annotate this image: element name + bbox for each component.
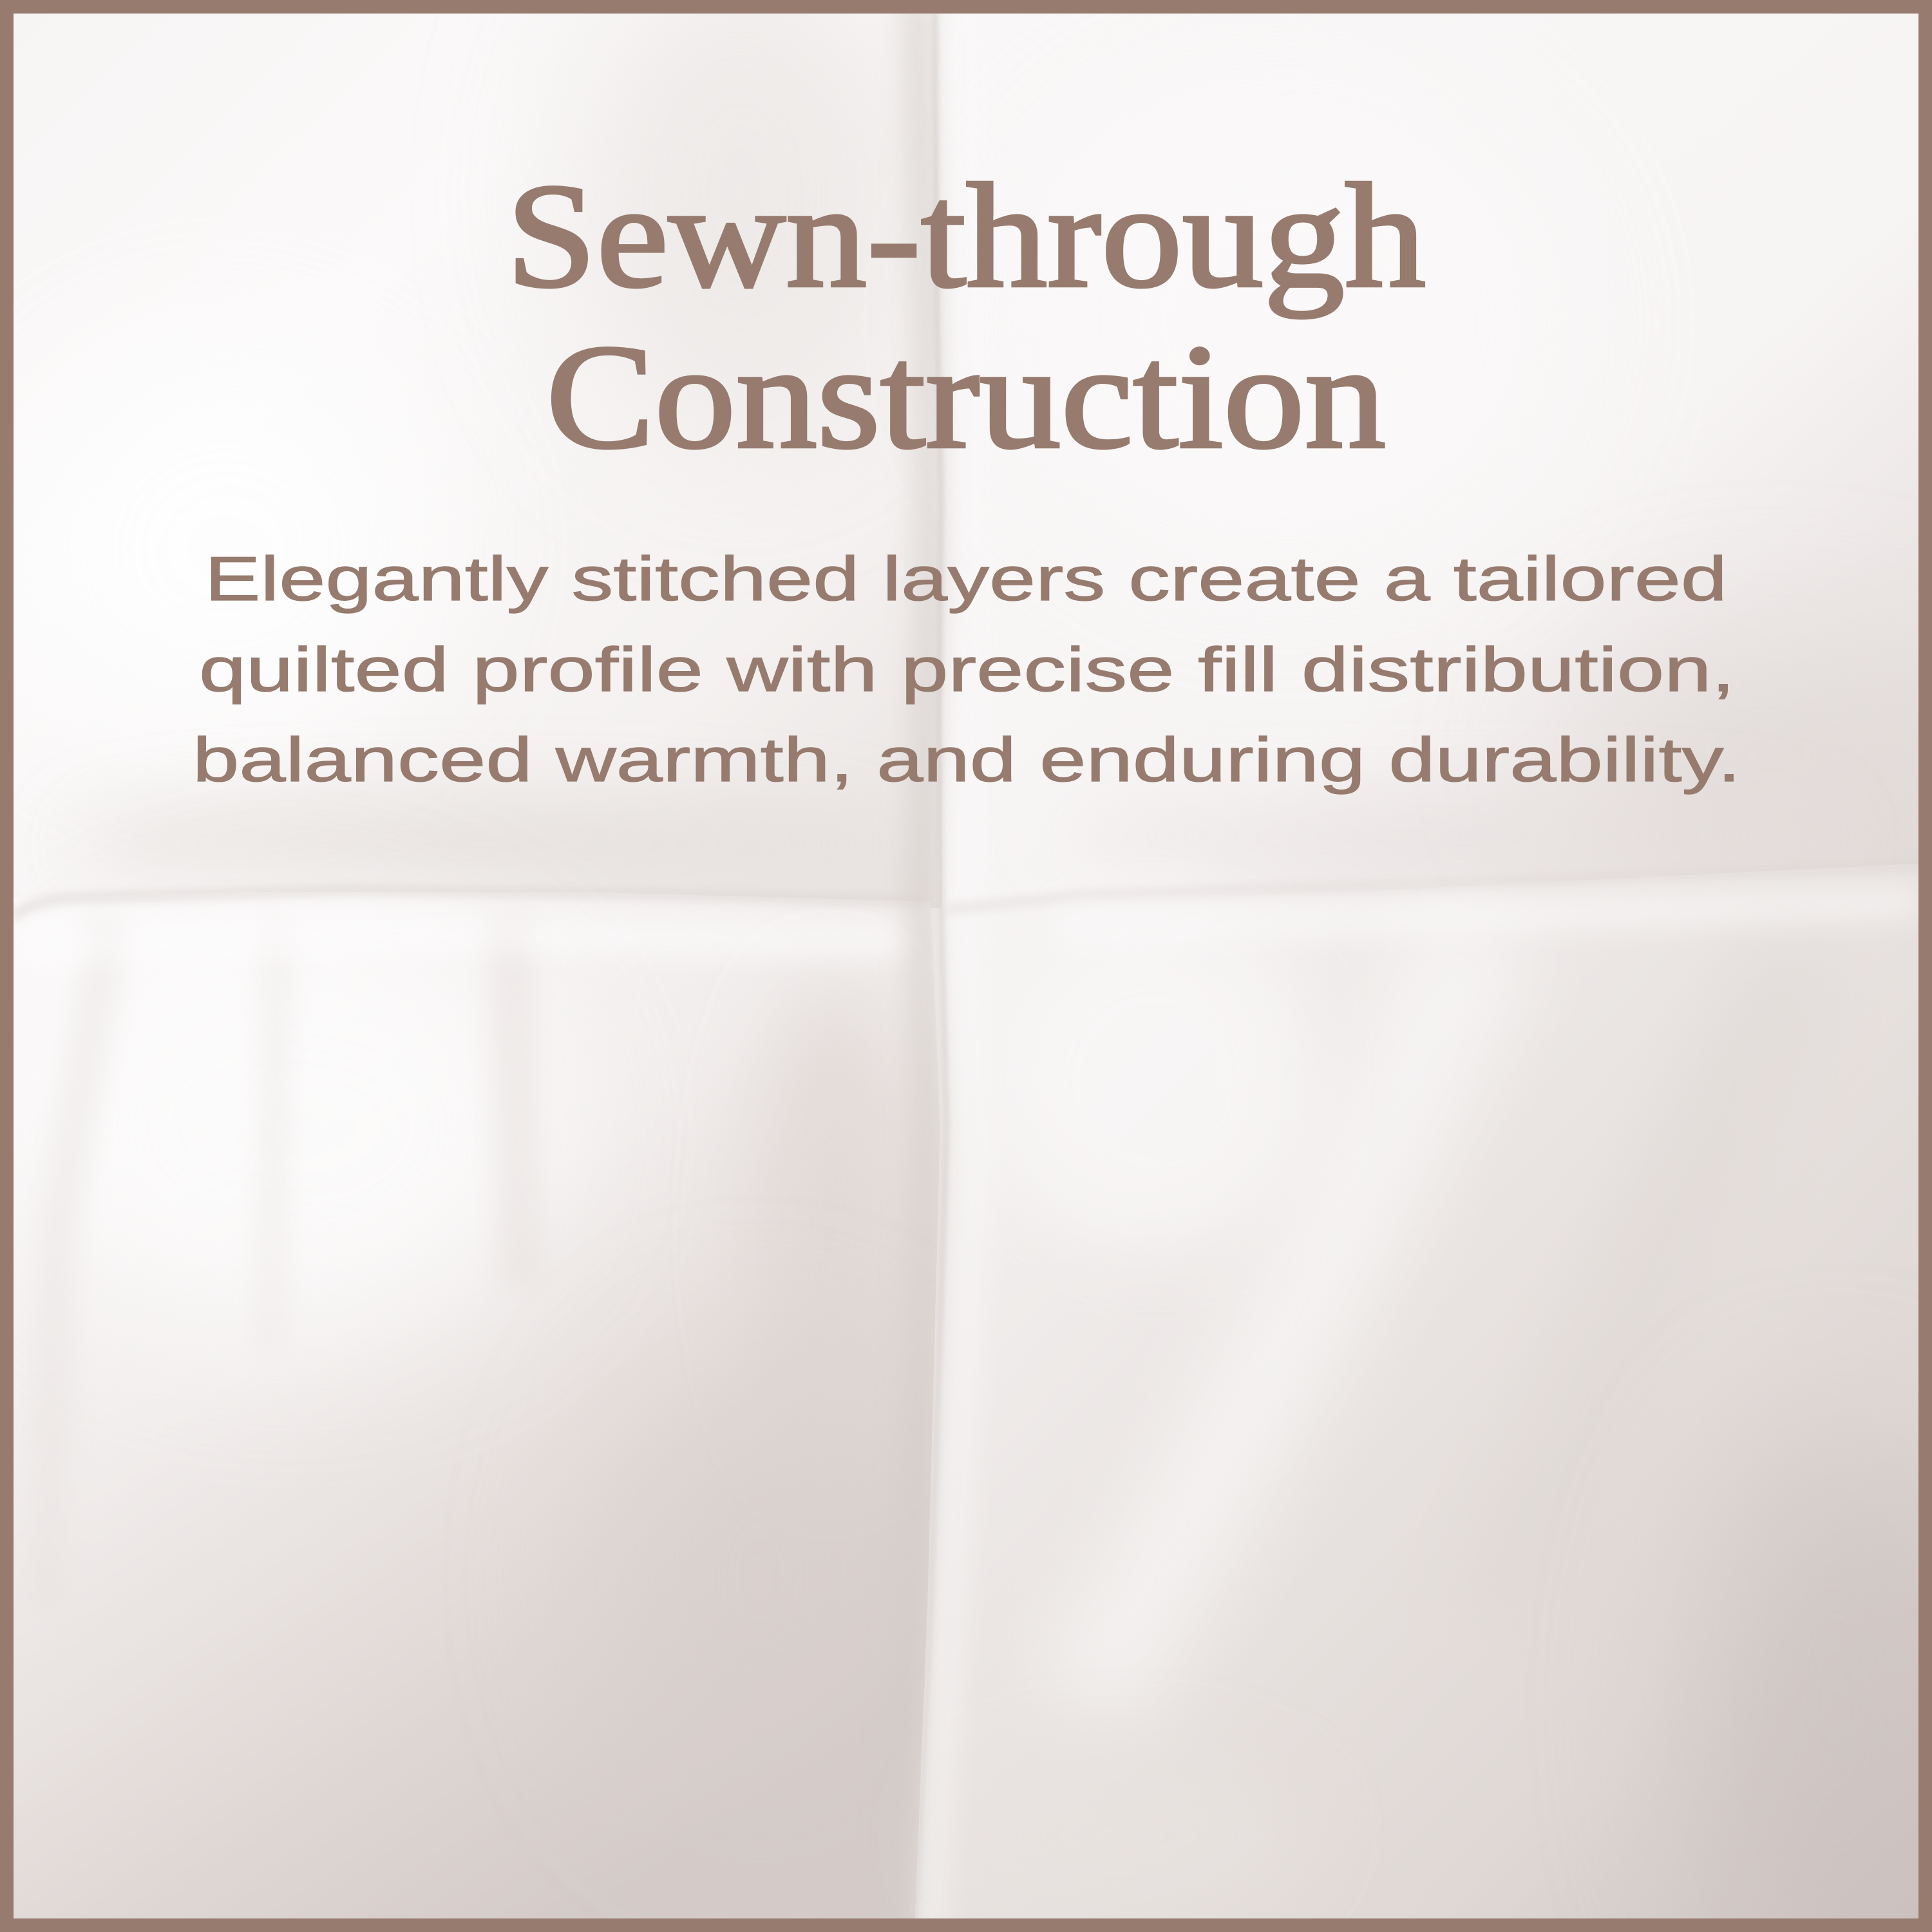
title: Construction — [546, 314, 1386, 480]
quilt panel: bottom left — [0, 892, 940, 1932]
description text — [193, 544, 1741, 795]
quilt panel: top right — [987, 82, 1918, 886]
description text: balanced warmth, and enduring durability. — [193, 724, 1741, 795]
horizontal stitched seam — [13, 866, 1932, 947]
description text: quilted profile with precise fill distribution, — [199, 634, 1735, 705]
title: Sewn-through — [506, 153, 1426, 319]
quilt panel: top left — [0, 0, 942, 908]
title — [506, 153, 1426, 480]
vertical stitched seam — [898, 0, 976, 1932]
description text: Elegantly stitched layers create a tailored — [205, 544, 1727, 614]
quilt panel: bottom right — [914, 863, 1932, 1932]
